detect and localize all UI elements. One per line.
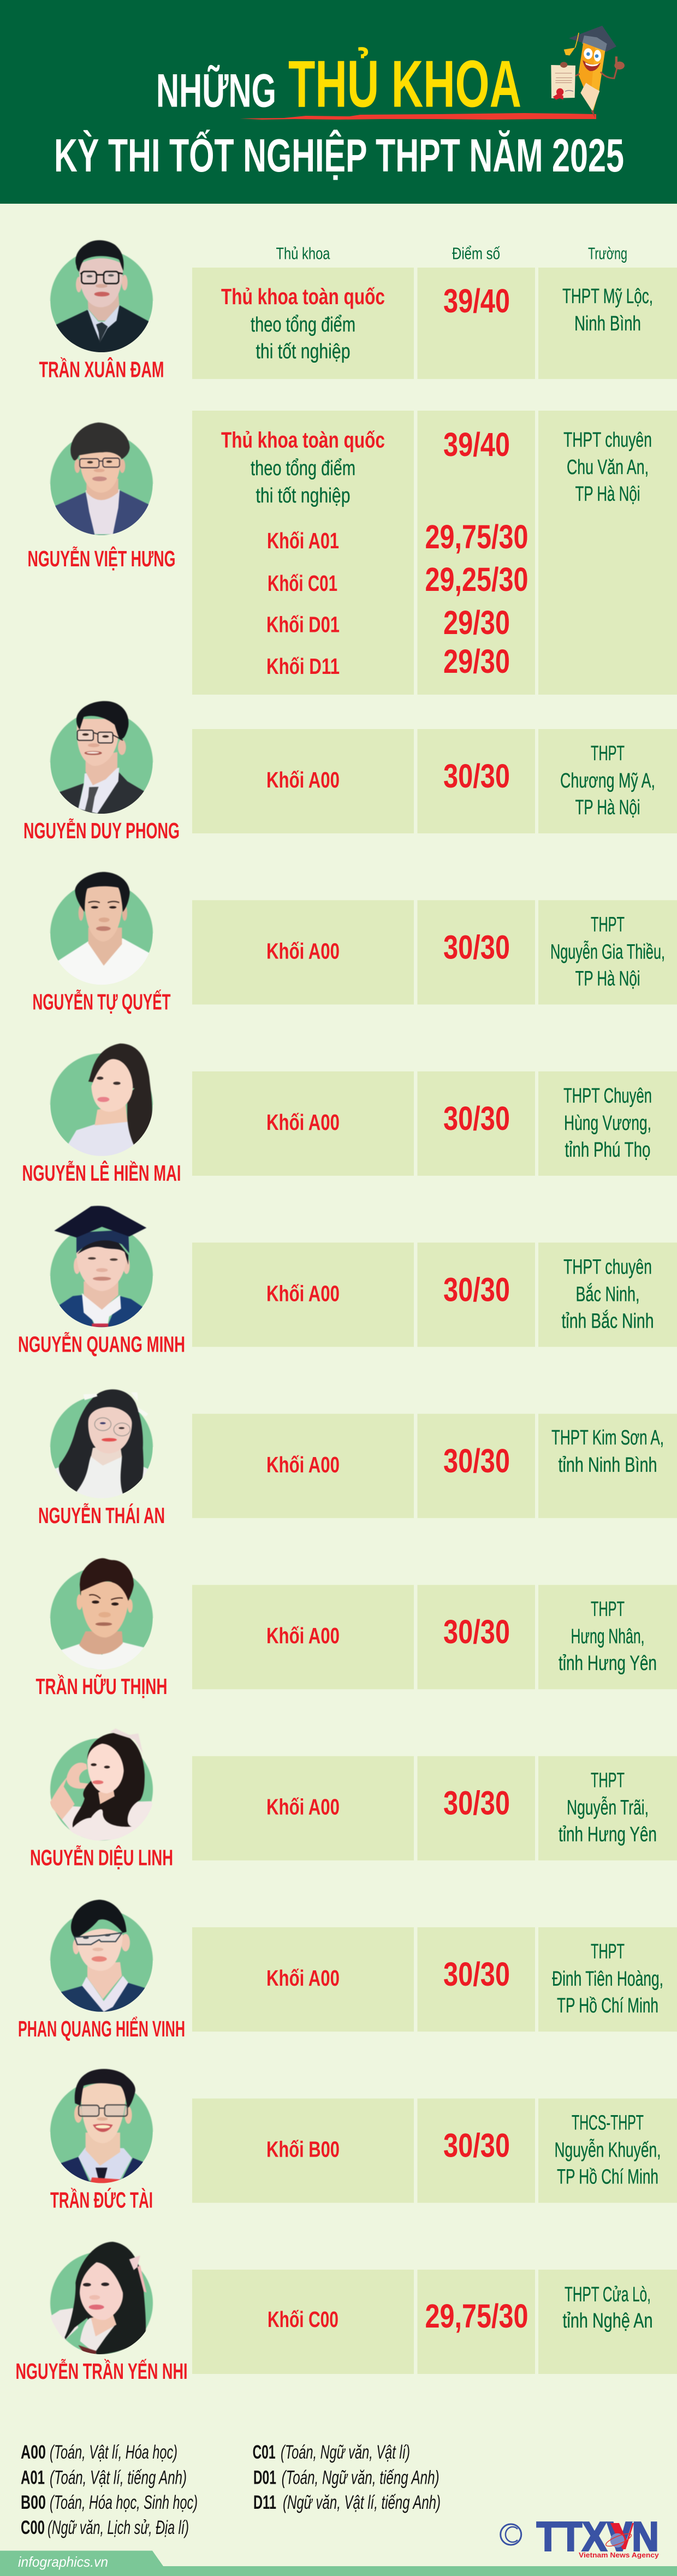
cell: school: TP Hà Nội: [575, 483, 640, 506]
portrait: Phan Quang Hiển Vinh: [50, 1900, 153, 2013]
legend: exam blocks: C00: [21, 2517, 45, 2538]
cell: score: 30/30: [443, 1956, 510, 1993]
cell: title: [192, 900, 414, 1004]
row 9: Nguyễn Diệu Linh: [30, 1728, 677, 1870]
cell: scores: 29/30: [443, 643, 510, 680]
legend: exam blocks: (Toán, Ngữ văn, tiếng Anh): [282, 2467, 440, 2489]
legend: exam blocks: (Ngữ văn, Lịch sử, Địa lí): [47, 2517, 189, 2538]
cell: title: Khối A00: [266, 1623, 340, 1648]
cell: score: [417, 1414, 535, 1518]
cell: score: [417, 729, 535, 833]
cell: title: Khối B00: [266, 2137, 340, 2162]
row 7: Nguyễn Thái An: [38, 1389, 677, 1528]
name: TRẦN HỮU THỊNH: [36, 1674, 167, 1699]
legend: exam blocks: B00: [21, 2492, 46, 2513]
cell: title: Thủ khoa toàn quốc: [221, 284, 385, 309]
cell: school: [538, 1414, 677, 1518]
portrait: Nguyễn Quang Minh: [50, 1206, 153, 1328]
cell: scores: 39/40: [443, 426, 510, 463]
cell: score: 30/30: [443, 2127, 510, 2164]
portrait: Nguyễn Tự Quyết: [50, 872, 153, 986]
cell: school: [538, 411, 677, 695]
row 2: Nguyễn Việt Hưng: [27, 411, 677, 695]
cell: title: [192, 729, 414, 833]
cell: scores: 29,25/30: [425, 561, 528, 598]
legend: exam blocks: [21, 2442, 441, 2538]
cell: score: [417, 1585, 535, 1689]
cell: school: THPT: [591, 913, 625, 936]
cell: titles: Khối C01: [268, 571, 337, 596]
column headers: [276, 244, 627, 263]
legend: exam blocks: D11: [253, 2492, 276, 2513]
cell: title: Khối A00: [266, 767, 340, 792]
cell: school: TP Hà Nội: [575, 796, 640, 819]
cell: titles: Thủ khoa toàn quốc: [221, 427, 385, 452]
cell: title: theo tổng điểm: [251, 313, 355, 336]
cell: title: [192, 1242, 414, 1347]
row 12: Nguyễn Trần Yến Nhi: [15, 2242, 677, 2384]
cell: school: [538, 1242, 677, 1347]
cell: title: Khối A00: [266, 1110, 340, 1135]
name: TRẦN XUÂN ĐAM: [39, 357, 164, 382]
cell: title: Khối A00: [266, 1281, 340, 1306]
cell: school: [538, 1585, 677, 1689]
portrait: Nguyễn Trần Yến Nhi: [49, 2242, 153, 2355]
legend: exam blocks: (Toán, Vật lí, tiếng Anh): [50, 2467, 187, 2489]
name: NGUYỄN TỰ QUYẾT: [33, 989, 170, 1014]
cell: school: THPT: [591, 1940, 625, 1963]
name: PHAN QUANG HIỂN VINH: [18, 2016, 185, 2041]
legend: exam blocks: (Toán, Vật lí, Hóa học): [50, 2442, 177, 2463]
column headers: Thủ khoa: [276, 244, 330, 263]
row 3: Nguyễn Duy Phong: [23, 701, 677, 843]
footer bar: [0, 2551, 677, 2576]
name: NGUYỄN DUY PHONG: [23, 818, 180, 843]
row 5: Nguyễn Lê Hiền Mai: [22, 1044, 677, 1186]
portrait: Trần Hữu Thịnh: [50, 1558, 153, 1671]
cell: title: Khối C00: [268, 2307, 339, 2332]
cell: school: [538, 268, 677, 379]
cell: scores: 29/30: [443, 604, 510, 641]
cell: school: [538, 2270, 677, 2374]
legend: exam blocks: D01: [253, 2467, 276, 2489]
cell: titles: Khối D11: [266, 654, 340, 679]
cell: score: [417, 1756, 535, 1861]
footer website: infographics.vn: [18, 2554, 108, 2570]
legend: exam blocks: (Toán, Ngữ văn, Vật lí): [281, 2442, 410, 2463]
row 11: Trần Đức Tài: [50, 2069, 677, 2213]
row 10: Phan Quang Hiển Vinh: [18, 1900, 677, 2041]
cell: score: 30/30: [443, 1613, 510, 1650]
cell: title: [192, 1756, 414, 1861]
title line 1: THỦ KHOA: [288, 47, 521, 121]
cell: school: TP Hà Nội: [575, 967, 640, 990]
cell: school: [538, 729, 677, 833]
cell: titles: Khối D01: [266, 612, 340, 637]
portrait: Nguyễn Diệu Linh: [49, 1728, 153, 1841]
cell: titles: [192, 411, 414, 695]
cell: score: [417, 1927, 535, 2032]
portrait: Trần Đức Tài: [50, 2069, 153, 2185]
cell: scores: [417, 411, 535, 695]
header banner: [0, 0, 677, 204]
portrait: Nguyễn Duy Phong: [50, 701, 153, 819]
red brush underline: [240, 113, 596, 120]
cell: school: THPT: [591, 1769, 625, 1792]
portrait: Trần Xuân Đam: [50, 240, 153, 356]
cell: score: [417, 1071, 535, 1176]
cell: titles: theo tổng điểm: [251, 457, 355, 480]
column headers: Điểm số: [452, 244, 500, 263]
cell: score: 39/40: [443, 282, 510, 319]
cell: score: 30/30: [443, 757, 510, 795]
cell: school: Bắc Ninh,: [575, 1282, 640, 1306]
cell: school: [538, 1927, 677, 2032]
cell: score: 29,75/30: [425, 2297, 528, 2335]
name: TRẦN ĐỨC TÀI: [50, 2188, 153, 2213]
cell: school: [538, 1071, 677, 1176]
cell: title: [192, 2099, 414, 2203]
title line 1: NHỮNG: [156, 64, 276, 117]
cell: title: [192, 1585, 414, 1689]
cell: score: [417, 900, 535, 1004]
cell: title: Khối A00: [266, 938, 340, 963]
name: NGUYỄN TRẦN YẾN NHI: [15, 2359, 188, 2384]
legend: exam blocks: (Toán, Hóa học, Sinh học): [50, 2492, 198, 2513]
cell: school: THPT: [591, 742, 625, 765]
cell: score: [417, 2099, 535, 2203]
cell: score: [417, 2270, 535, 2374]
cell: titles: thi tốt nghiệp: [256, 484, 351, 507]
row 6: Nguyễn Quang Minh: [18, 1206, 677, 1357]
cell: title: [192, 1414, 414, 1518]
portrait: Nguyễn Việt Hưng: [50, 423, 153, 539]
cell: score: 30/30: [443, 928, 510, 966]
cell: score: 30/30: [443, 1785, 510, 1822]
legend: exam blocks: A01: [21, 2467, 45, 2489]
cell: school: [538, 2099, 677, 2203]
logo: TTXVN: TTXVN: [537, 2514, 659, 2560]
cell: score: 30/30: [443, 1100, 510, 1137]
cell: title: Khối A00: [266, 1452, 340, 1477]
cell: score: [417, 268, 535, 379]
title line 1: [156, 47, 521, 121]
name: NGUYỄN DIỆU LINH: [30, 1845, 173, 1870]
icon: pencil mascot with diploma: [551, 26, 625, 118]
row 8: Trần Hữu Thịnh: [36, 1558, 677, 1699]
cell: title: thi tốt nghiệp: [256, 340, 351, 363]
legend: exam blocks: C01: [253, 2442, 276, 2463]
cell: school: Ninh Bình: [574, 312, 641, 335]
cell: school: [538, 1756, 677, 1861]
cell: title: [192, 2270, 414, 2374]
legend: exam blocks: (Ngữ văn, Vật lí, tiếng Anh): [283, 2492, 441, 2513]
logo: TTXVN: Vietnam News Agency: [579, 2551, 660, 2559]
cell: title: [192, 1927, 414, 2032]
name: NGUYỄN QUANG MINH: [18, 1331, 185, 1357]
name: NGUYỄN VIỆT HƯNG: [27, 546, 176, 571]
cell: title: [192, 268, 414, 379]
cell: school: THPT: [591, 1598, 625, 1621]
row 4: Nguyễn Tự Quyết: [33, 872, 677, 1014]
cell: score: [417, 1242, 535, 1347]
column headers: Trường: [588, 244, 627, 263]
cell: title: Khối A00: [266, 1965, 340, 1991]
legend: exam blocks: A00: [21, 2442, 46, 2463]
cell: score: 30/30: [443, 1271, 510, 1308]
portrait: Nguyễn Thái An: [50, 1389, 153, 1499]
cell: scores: 29,75/30: [425, 518, 528, 555]
cell: title: [192, 1071, 414, 1176]
cell: school: [538, 900, 677, 1004]
icon: copyright: [501, 2524, 521, 2545]
cell: score: 30/30: [443, 1442, 510, 1479]
name: NGUYỄN THÁI AN: [38, 1503, 165, 1528]
portrait: Nguyễn Lê Hiền Mai: [50, 1044, 153, 1158]
row 1: Trần Xuân Đam: [39, 240, 677, 382]
cell: title: Khối A00: [266, 1795, 340, 1820]
cell: titles: Khối A01: [267, 528, 339, 553]
name: NGUYỄN LÊ HIỀN MAI: [22, 1160, 181, 1186]
